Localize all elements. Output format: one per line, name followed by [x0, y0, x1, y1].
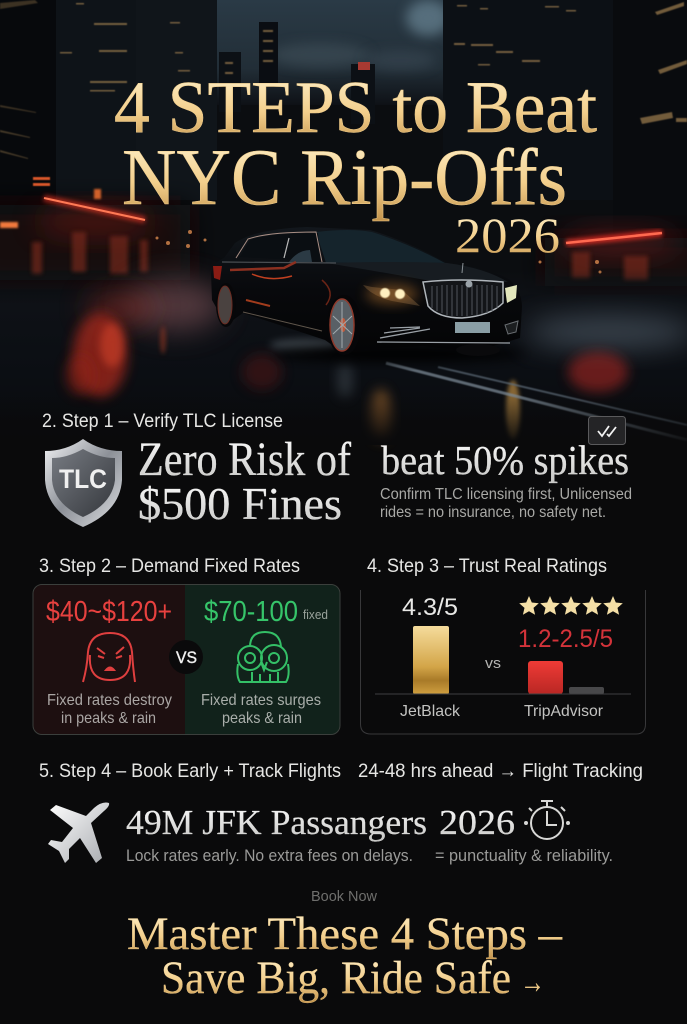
price: fixed: fixed [303, 607, 328, 622]
heading: step 1: 2. Step 1 – Verify TLC License [42, 410, 283, 432]
headline: JFK passengers: 49M JFK Passangers [126, 803, 427, 842]
headline: save big, ride safe: Save Big, Ride Safe [161, 952, 511, 1004]
bar: TripAdvisor grey [569, 687, 604, 694]
stormy sky [217, 0, 450, 105]
icon: five stars [519, 596, 623, 615]
icon: double check badge [588, 416, 626, 444]
title [114, 67, 597, 263]
rating: TripAdvisor: 1.2-2.5/5 [518, 625, 613, 653]
panel half: surge price [33, 584, 185, 734]
caption: fixed: peaks & rain [222, 710, 302, 727]
caption: fixed: Fixed rates surges [201, 692, 321, 709]
caption: fixed [201, 692, 321, 727]
label: TripAdvisor: TripAdvisor [524, 703, 604, 720]
label: book now: Book Now [311, 888, 377, 905]
panel outline [33, 584, 340, 734]
section: step 1 verify TLC license [42, 410, 632, 529]
city buildings [0, 0, 687, 240]
body text: punctuality: = punctuality & reliability. [435, 846, 613, 865]
heading: step 4: 5. Step 4 – Book Early + Track Flights [39, 760, 341, 782]
body text: licensing note [380, 486, 632, 521]
body text: lock rates: Lock rates early. No extra fees on delays. [126, 846, 413, 865]
bar: JetBlack [413, 626, 449, 694]
section: step 3 trust real ratings [360, 555, 646, 734]
car: black limousine [211, 227, 525, 362]
icon: TLC shield: TLC [59, 464, 107, 494]
caption: surge: in peaks & rain [61, 710, 156, 727]
title line 1: 4 STEPS to Beat [114, 67, 597, 149]
background photo: rainy night city street [0, 0, 687, 445]
icon: TLC shield [45, 439, 122, 527]
body text: licensing note: Confirm TLC licensing first, Unlicensed [380, 486, 632, 503]
headline: zero risk of $500 fines: Zero Risk of [138, 433, 351, 486]
bar: TripAdvisor red [528, 661, 563, 694]
body text: licensing note: rides = no insurance, no safety net. [380, 504, 606, 521]
panel outline [360, 590, 646, 734]
subheading: booking window: 24-48 hrs ahead → Flight Tracking [358, 760, 643, 782]
price: surge: $40~$120+ [46, 596, 172, 628]
icon: owl [237, 632, 289, 682]
panel half: fixed price [185, 584, 340, 734]
label: JetBlack: JetBlack [400, 703, 461, 720]
badge: vs: VS [176, 648, 197, 667]
caption: surge: Fixed rates destroy [47, 692, 172, 709]
heading: step 2: 3. Step 2 – Demand Fixed Rates [39, 555, 300, 577]
street shops and neon [0, 177, 687, 286]
wet road [0, 270, 687, 445]
icon: airplane [48, 803, 109, 863]
rating: JetBlack: 4.3/5 [402, 594, 458, 621]
headline: master these 4 steps: Master These 4 Steps – [127, 908, 562, 960]
badge: vs [169, 640, 203, 674]
call to action [127, 888, 562, 1004]
headline: beat 50% spikes: beat 50% spikes [381, 437, 629, 483]
price: fixed: $70-100 [204, 596, 298, 628]
headline: zero risk of $500 fines: $500 Fines [138, 478, 342, 529]
panel: ratings bar chart [360, 590, 646, 734]
headline: save big, ride safe: → [520, 963, 545, 1001]
section: step 2 demand fixed rates [33, 555, 340, 734]
heading: step 3: 4. Step 3 – Trust Real Ratings [367, 555, 607, 577]
panel: price comparison [33, 584, 340, 734]
icon: angry face [83, 633, 135, 682]
label: vs: vs [485, 655, 501, 672]
icon: stopwatch [525, 801, 569, 839]
title line 2: NYC Rip-Offs [122, 134, 567, 222]
title year: 2026 [455, 207, 560, 263]
caption: surge [47, 692, 172, 727]
headline: JFK passengers: 2026 [439, 803, 515, 842]
headline: zero risk of $500 fines [138, 433, 351, 529]
section: step 4 book early and track flights [39, 760, 643, 865]
